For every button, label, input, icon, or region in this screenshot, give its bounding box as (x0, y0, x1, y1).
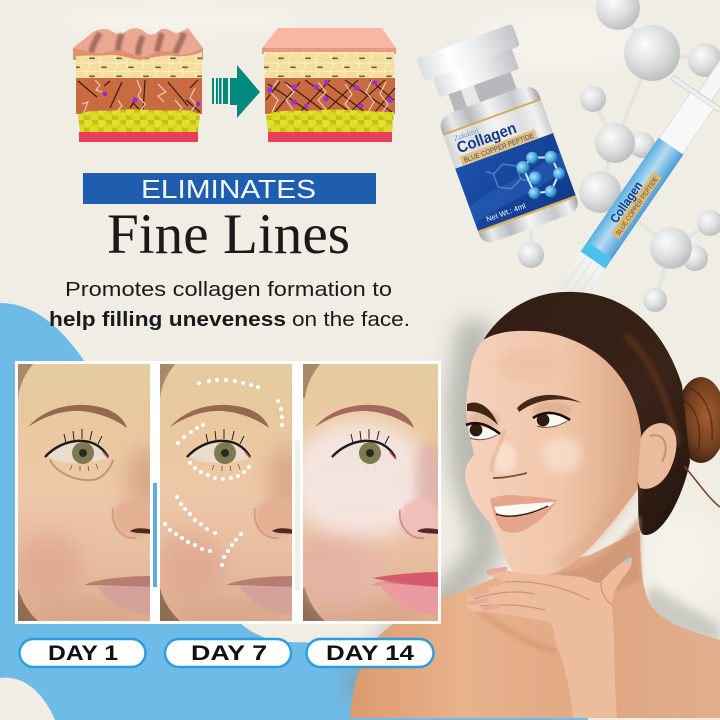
cream corner shape (0, 678, 55, 720)
label: day 7 (165, 639, 291, 667)
dermis with dense fibres (265, 78, 395, 114)
skin diagram: after (262, 28, 396, 142)
muscle layer (268, 132, 392, 142)
smooth skin surface (262, 28, 396, 52)
label: day 14 (306, 639, 434, 667)
back hair and bun (470, 292, 720, 535)
muscle layer (79, 132, 198, 142)
wavy skin surface (73, 28, 203, 60)
vial brand text: Zakdavi (452, 126, 480, 143)
vial gold strip: BLUE COPPER PEPTIDE (463, 133, 535, 165)
molecule model (518, 0, 720, 312)
heading banner: ELIMINATES (141, 174, 316, 204)
description text: help filling uneveness (49, 308, 286, 331)
epidermis cells (76, 52, 202, 79)
ear (636, 423, 676, 489)
vial product name: Collagen (455, 120, 519, 157)
left eye (466, 423, 500, 440)
fingernails (471, 569, 505, 609)
description text (49, 278, 410, 331)
woman portrait (350, 292, 720, 718)
neck shadow (560, 515, 641, 592)
shoulders and neck (350, 530, 720, 718)
blue background shape (0, 303, 390, 720)
photo: day 7 (160, 364, 292, 621)
face shading (468, 347, 637, 570)
right eye (533, 413, 570, 427)
before and after photo panel (10, 361, 450, 626)
hand (467, 558, 632, 718)
syringe (537, 16, 720, 308)
bottom edge strip (350, 718, 588, 720)
fat layer (266, 109, 394, 132)
nose line (493, 473, 527, 478)
description text: Promotes collagen formation to (65, 278, 392, 301)
main title: Fine Lines (107, 203, 350, 266)
syringe: BLUE COPPER PEPTIDE (615, 176, 660, 237)
dermis with damaged fibres (76, 78, 202, 114)
photo: day 1 (18, 364, 150, 621)
collagen vial (415, 23, 581, 246)
heading banner (83, 173, 376, 204)
day labels (20, 639, 434, 667)
right eyebrow (517, 395, 582, 412)
vial net weight: Net Wt.: 4ml (485, 201, 527, 224)
label: day 7: DAY 7 (191, 642, 267, 665)
dotted treatment markers (163, 378, 284, 567)
label: day 14: DAY 14 (326, 642, 414, 665)
photo: day 14 (303, 364, 438, 621)
fat layer (78, 109, 200, 132)
smile (490, 495, 557, 533)
left eyebrow (467, 403, 498, 425)
face (465, 331, 641, 576)
description text: on the face. (292, 308, 410, 331)
teal arrow (212, 65, 260, 118)
label: day 1 (20, 639, 146, 667)
epidermis cells (264, 52, 394, 79)
woman's cast shadow (345, 320, 720, 700)
syringe: Collagen (607, 179, 645, 226)
skin diagram: before (73, 28, 203, 142)
vial molecule graphic (485, 143, 572, 216)
thumb nail (627, 559, 630, 561)
label: day 1: DAY 1 (48, 642, 118, 665)
